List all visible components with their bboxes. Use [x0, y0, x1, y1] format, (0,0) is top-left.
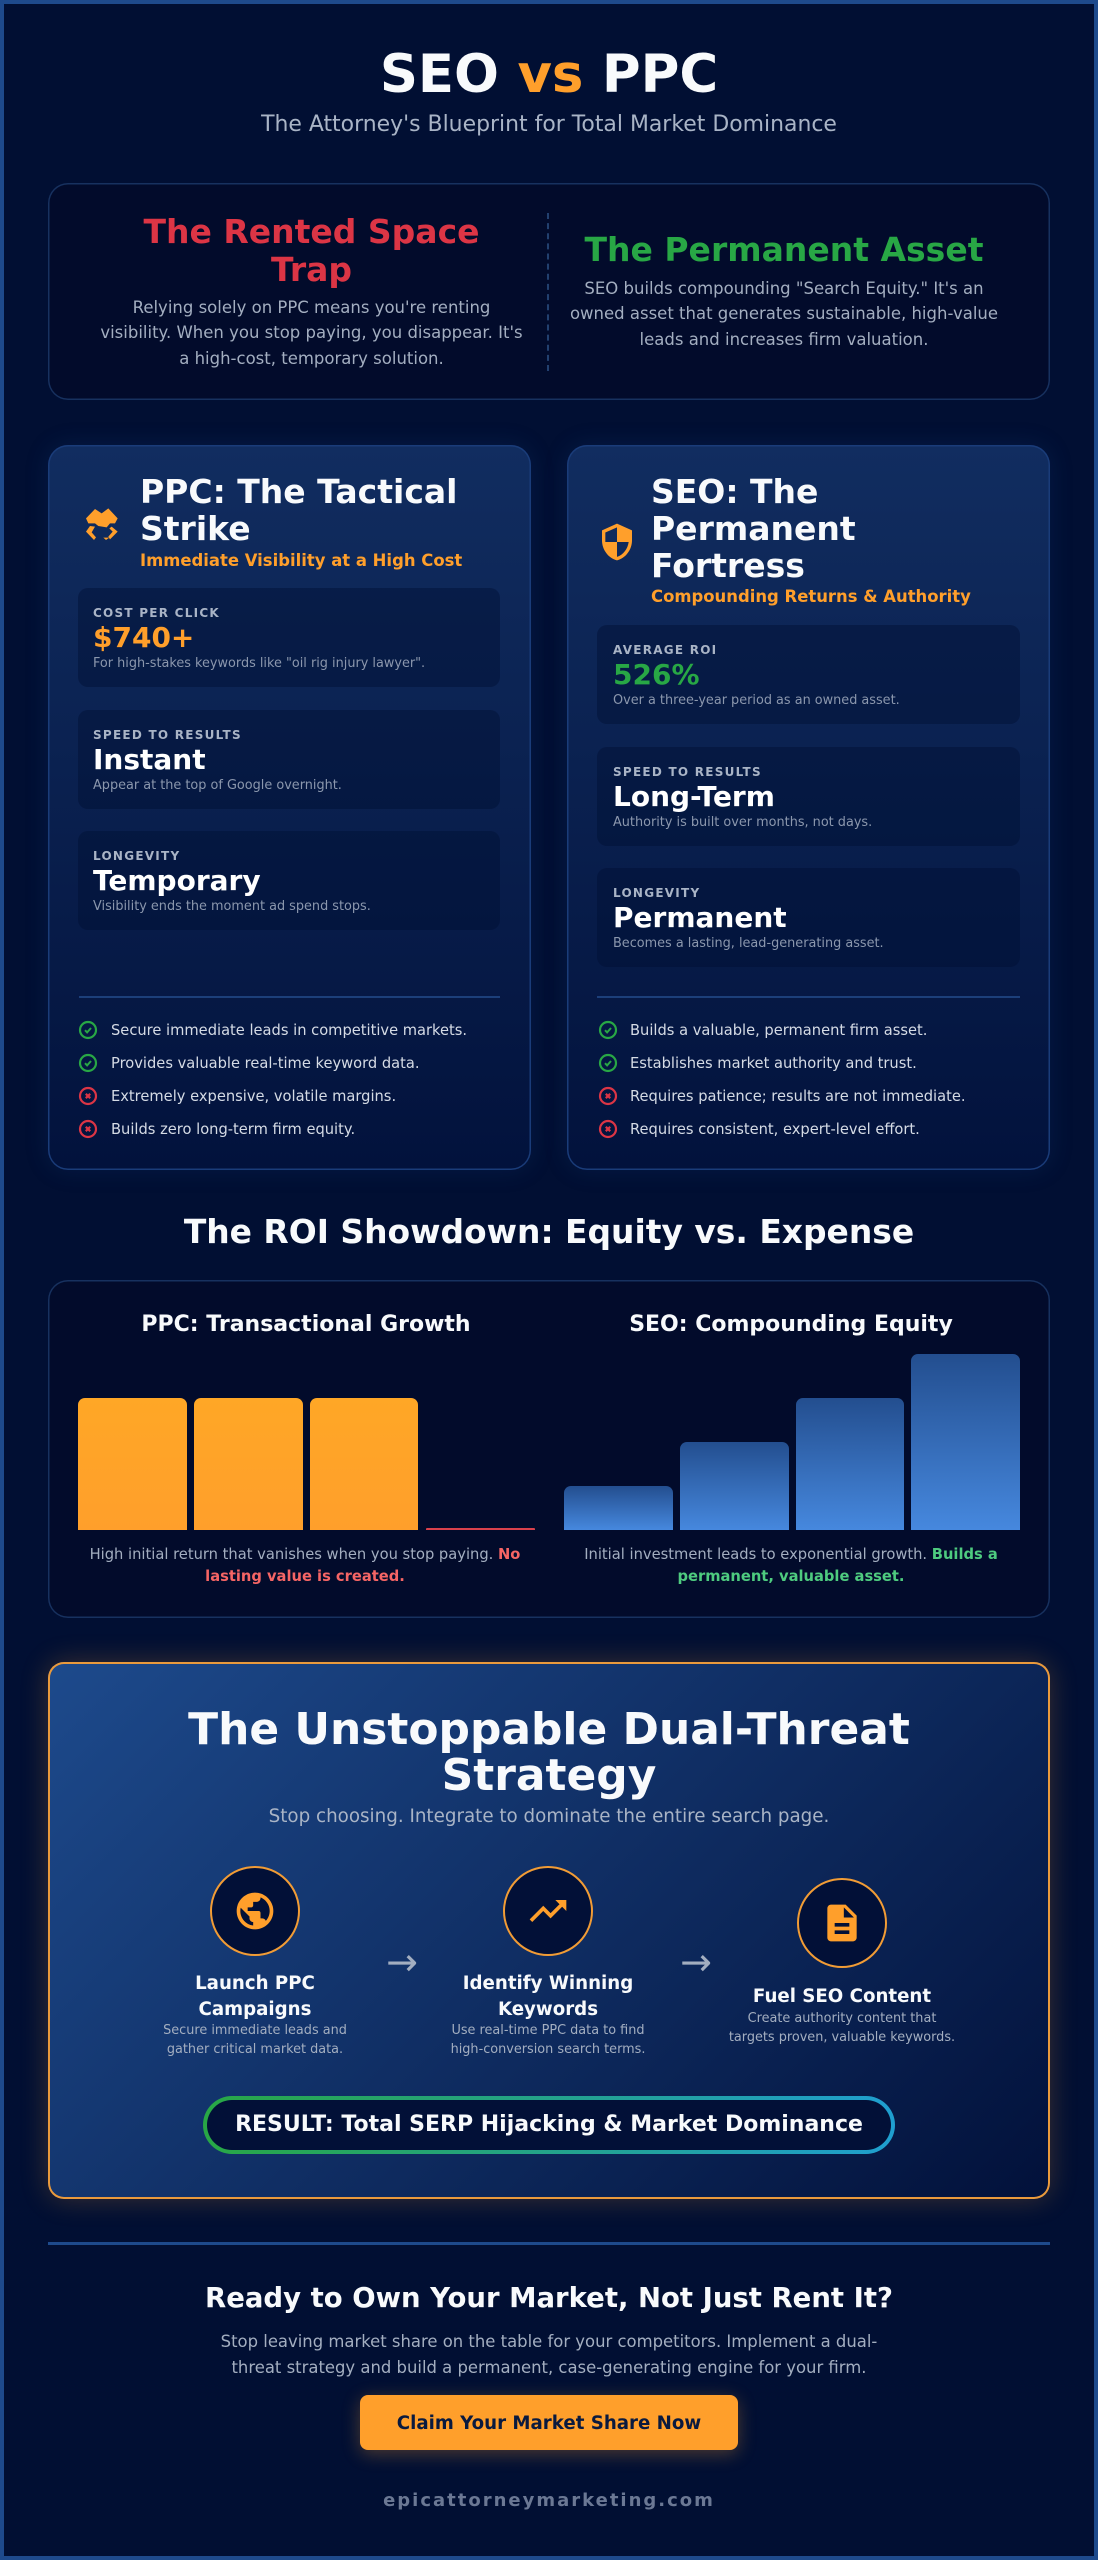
heading: PPC: Strike	[140, 509, 251, 548]
list item: con: Extremely expensive, volatile margins.	[111, 1088, 396, 1105]
stat: speed to results: Instant	[93, 743, 206, 776]
stat: longevity: LONGEVITY	[613, 886, 700, 900]
step description: Use real-time PPC data to find	[451, 2023, 645, 2038]
divider: dashed	[547, 213, 549, 371]
subheading: dual-threat strategy: Stop choosing. Integrate to dominate the entire search page.	[269, 1806, 829, 1827]
button: claim your market share	[360, 2395, 738, 2450]
text: permanent asset description: owned asset that generates sustainable, high-value	[570, 304, 998, 323]
bar: SEO year 4	[911, 1354, 1020, 1530]
panel: ROI charts	[48, 1280, 1050, 1618]
heading: PPC: PPC: The Tactical	[140, 472, 457, 511]
arrow: →	[680, 1940, 712, 1984]
stat: average ROI: 526%	[613, 658, 700, 691]
button: claim your market share: Claim Your Market Share Now	[397, 2413, 701, 2434]
step title: Fuel SEO Content	[753, 1986, 931, 2007]
list item: pro: Builds a valuable, permanent firm asset.	[630, 1022, 927, 1039]
stat: longevity: Visibility ends the moment ad spend stops.	[93, 899, 371, 914]
heading: dual-threat strategy	[188, 1704, 910, 1801]
chart caption: PPC	[90, 1546, 520, 1585]
panel: dual-threat strategy	[48, 1662, 1050, 2199]
stat: longevity: Temporary	[93, 864, 261, 897]
panel: SEO permanent fortress	[567, 445, 1050, 1170]
chart caption: SEO	[584, 1546, 998, 1585]
step description	[163, 2023, 347, 2056]
text: rented space description: visibility. When you stop paying, you disappear. It's	[100, 323, 523, 342]
footer url: epicattorneymarketing.com	[383, 2490, 715, 2511]
chart caption: PPC: lasting value is created.	[205, 1568, 405, 1585]
step title: Campaigns	[199, 1999, 311, 2020]
stat: speed to results: SPEED TO RESULTS	[93, 728, 242, 742]
bar: SEO year 1	[564, 1486, 673, 1530]
list item: pro: Establishes market authority and trust.	[630, 1055, 917, 1072]
heading: SEO: SEO: The	[651, 472, 818, 511]
list item: pro: Secure immediate leads in competitive markets.	[111, 1022, 467, 1039]
subheading: PPC: Immediate Visibility at a High Cost	[140, 551, 462, 570]
text: permanent asset description: leads and increases firm valuation.	[640, 330, 928, 349]
heading: dual-threat strategy: Strategy	[442, 1750, 656, 1801]
text: rented space description: a high-cost, temporary solution.	[179, 349, 444, 368]
heading: PPC	[140, 472, 457, 548]
stat: average ROI: AVERAGE ROI	[613, 643, 717, 657]
step description: gather critical market data.	[167, 2042, 343, 2056]
stat: average ROI: Over a three-year period as an owned asset.	[613, 693, 900, 708]
chart heading: SEO: SEO: Compounding Equity	[629, 1312, 953, 1337]
heading: ROI showdown: The ROI Showdown: Equity vs. Expense	[184, 1212, 914, 1251]
heading: the rented space trap: The Rented Space	[143, 212, 480, 251]
result pill	[203, 2096, 895, 2154]
step: launch PPC campaigns	[163, 1866, 347, 2056]
heading: the rented space trap: Trap	[271, 250, 352, 289]
text: rented space description: Relying solely on PPC means you're renting	[133, 298, 490, 317]
bar chart: SEO	[564, 1354, 1020, 1530]
heading: dual-threat strategy: The Unstoppable Dual-Threat	[188, 1704, 910, 1755]
heading: SEO: Fortress	[651, 546, 805, 585]
stat: longevity: LONGEVITY	[93, 849, 180, 863]
text: rented space description	[100, 298, 523, 368]
stat: longevity: Permanent	[613, 901, 787, 934]
bar: PPC year 2	[194, 1398, 303, 1530]
stat: speed to results	[597, 747, 1020, 846]
step: identify winning keywords	[451, 1866, 645, 2056]
stat: cost per click	[78, 588, 500, 687]
stat: longevity	[78, 831, 500, 930]
stat: cost per click: $740+	[93, 621, 194, 654]
chart heading: PPC: PPC: Transactional Growth	[141, 1312, 471, 1337]
list item: pro: Provides valuable real-time keyword data.	[111, 1055, 420, 1072]
stat: speed to results: Appear at the top of Google overnight.	[93, 778, 342, 793]
heading: the rented space trap	[143, 212, 480, 289]
stat: speed to results	[78, 710, 500, 809]
step description	[729, 2011, 955, 2044]
result text: RESULT: Total SERP Hijacking & Market Dominance	[235, 2112, 863, 2137]
step title: Launch PPC	[195, 1973, 315, 1994]
step title: Identify Winning	[463, 1973, 633, 1994]
step description: targets proven, valuable keywords.	[729, 2030, 955, 2044]
icon: trending up	[503, 1866, 593, 1956]
bar: SEO year 3	[796, 1398, 904, 1530]
stat: cost per click: COST PER CLICK	[93, 606, 220, 620]
list item: con: Requires consistent, expert-level effort.	[630, 1121, 920, 1138]
text: permanent asset description	[570, 279, 998, 349]
step description: Secure immediate leads and	[163, 2023, 347, 2038]
panel: PPC tactical strike	[48, 445, 531, 1170]
heading: SEO: Permanent	[651, 509, 856, 548]
step title	[463, 1973, 633, 2020]
step description	[451, 2023, 645, 2056]
text: permanent asset description: SEO builds compounding "Search Equity." It's an	[584, 279, 984, 298]
chart caption: PPC: High initial return that vanishes when you stop paying. No	[90, 1546, 520, 1563]
chart caption: SEO: permanent, valuable asset.	[678, 1568, 904, 1585]
arrow: →	[386, 1940, 418, 1984]
panel: rented space vs permanent asset	[48, 183, 1050, 400]
icon: document	[797, 1878, 887, 1968]
subtitle: The Attorney's Blueprint for Total Market Dominance	[261, 112, 837, 137]
bar: PPC year 3	[310, 1398, 418, 1530]
bar chart: PPC	[78, 1398, 535, 1530]
list item: con: Requires patience; results are not immediate.	[630, 1088, 966, 1105]
stat: cost per click: For high-stakes keywords like "oil rig injury lawyer".	[93, 656, 425, 671]
title: SEO vs PPC	[380, 44, 718, 105]
step: fuel SEO content	[729, 1878, 955, 2044]
step description: Create authority content that	[748, 2011, 936, 2026]
bar: SEO year 2	[680, 1442, 789, 1530]
icon: shield	[602, 524, 632, 560]
bar: PPC year 1	[78, 1398, 187, 1530]
bar: PPC after stop	[426, 1528, 535, 1530]
list item: con: Builds zero long-term firm equity.	[111, 1121, 355, 1138]
text: call to action: Stop leaving market share on the table for your competitors. Implement a dual-	[221, 2332, 877, 2351]
result text	[207, 2100, 891, 2150]
subheading: SEO: Compounding Returns & Authority	[651, 587, 971, 606]
stat: longevity: Becomes a lasting, lead-generating asset.	[613, 936, 884, 951]
heading: SEO	[651, 472, 856, 585]
step description: high-conversion search terms.	[451, 2042, 645, 2056]
stat: longevity	[597, 868, 1020, 967]
step title: Keywords	[498, 1999, 598, 2020]
icon: PPC strike	[86, 508, 118, 540]
stat: speed to results: Long-Term	[613, 780, 775, 813]
text: call to action	[221, 2332, 877, 2377]
step title	[195, 1973, 315, 2020]
stat: speed to results: SPEED TO RESULTS	[613, 765, 762, 779]
text: call to action: threat strategy and build a permanent, case-generating engine for your firm.	[231, 2358, 866, 2377]
stat: speed to results: Authority is built over months, not days.	[613, 815, 872, 830]
chart caption: SEO: Initial investment leads to exponential growth. Builds a	[584, 1546, 998, 1563]
heading: call to action: Ready to Own Your Market, Not Just Rent It?	[205, 2282, 893, 2314]
stat: average ROI	[597, 625, 1020, 724]
heading: the permanent asset: The Permanent Asset	[584, 230, 983, 269]
icon: globe	[210, 1866, 300, 1956]
